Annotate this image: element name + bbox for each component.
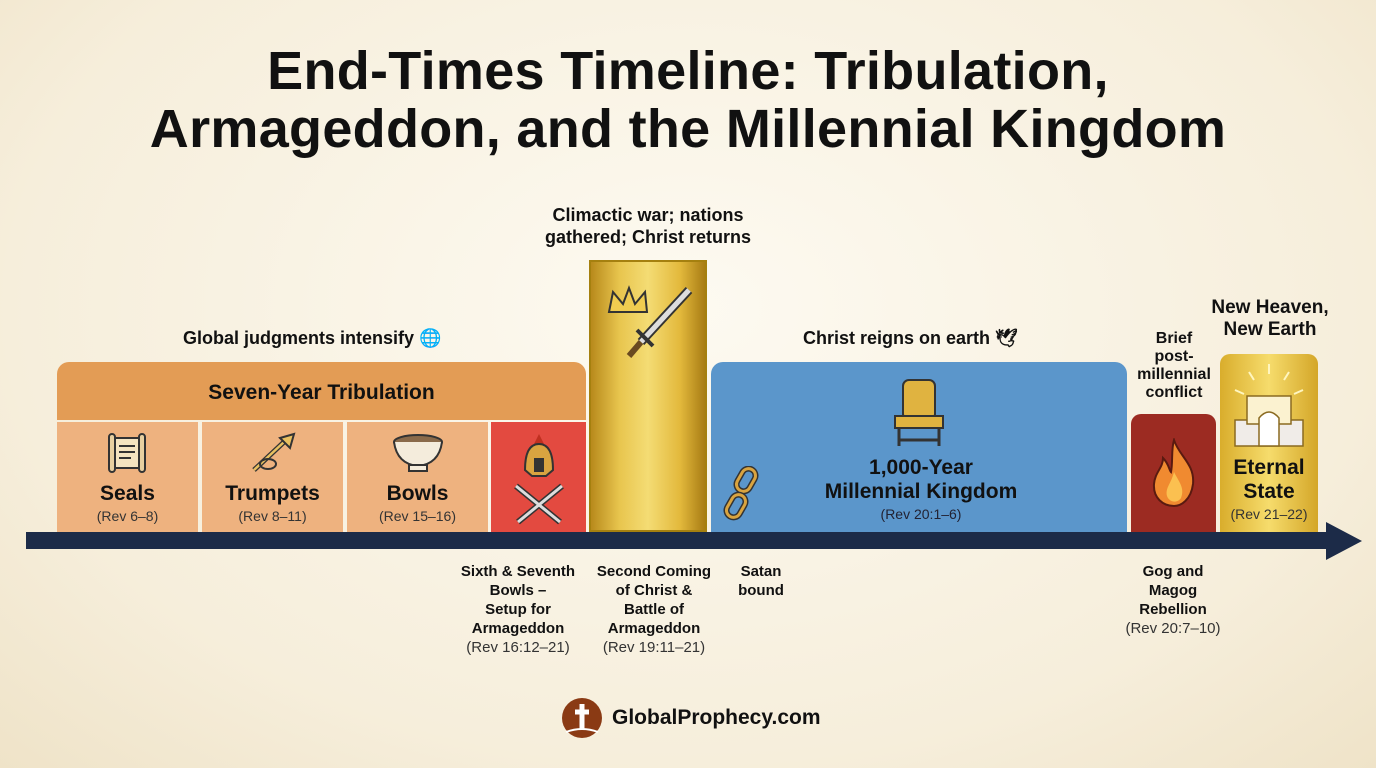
label: sixth & seventh bowls <box>461 563 575 656</box>
label: second coming <box>597 563 711 656</box>
title: Armageddon, and the Millennial Kingdom <box>150 99 1226 159</box>
panel: armageddon pillar <box>589 260 707 532</box>
panel: eternal state: State <box>1243 480 1295 503</box>
label: gog and magog: Gog and <box>1143 563 1203 580</box>
label: second coming: of Christ & <box>616 582 692 599</box>
label: sixth & seventh bowls: Sixth & Seventh <box>461 563 575 580</box>
panel: eternal state: Eternal <box>1233 456 1305 479</box>
label: second coming: (Rev 19:11–21) <box>603 639 705 656</box>
text: site name: GlobalProphecy.com <box>612 706 820 729</box>
panel: seals: Seals <box>100 482 155 505</box>
caption: brief conflict: conflict <box>1146 384 1202 401</box>
arrow: timeline <box>26 522 1362 560</box>
panel: seals <box>57 422 198 532</box>
panel: eternal state <box>1220 354 1318 532</box>
label: sixth & seventh bowls: Bowls – <box>490 582 546 599</box>
label: satan bound: Satan <box>741 563 781 580</box>
caption: brief conflict: millennial <box>1137 366 1211 383</box>
footer logo <box>562 698 820 738</box>
icon: crown and sword <box>608 285 692 358</box>
text: kingdom name <box>825 456 1017 503</box>
panel: sixth & seventh bowls <box>491 422 586 532</box>
panel: trumpets <box>202 422 343 532</box>
panel: millennial kingdom <box>711 362 1127 532</box>
caption: new heaven: New Heaven, New Earth <box>1211 297 1329 340</box>
label: sixth & seventh bowls: (Rev 16:12–21) <box>466 639 570 656</box>
label: satan bound: bound <box>738 582 784 599</box>
caption: climactic war: Climactic war; nations gathered; Christ returns <box>545 205 751 247</box>
label: gog and magog <box>1125 563 1221 637</box>
panel: millennial kingdom: (Rev 20:1–6) <box>881 506 961 522</box>
label: second coming: Battle of <box>624 601 684 618</box>
caption: christ reigns: Christ reigns on earth 🕊 <box>803 328 1018 348</box>
header band: Seven-Year Tribulation <box>208 381 435 404</box>
label: satan bound <box>738 563 784 599</box>
panel: bowls <box>347 422 488 532</box>
panel: gog and magog <box>1131 414 1216 532</box>
caption: brief conflict <box>1137 330 1211 401</box>
label: sixth & seventh bowls: Setup for <box>485 601 551 618</box>
panel: bowls: (Rev 15–16) <box>379 508 456 524</box>
caption: global judgments: Global judgments intensify 🌐 <box>183 328 441 348</box>
icon: throne <box>894 379 944 446</box>
label: sixth & seventh bowls: Armageddon <box>472 620 564 637</box>
text: kingdom name: 1,000-Year <box>869 456 973 479</box>
icon: bowl <box>393 434 443 472</box>
panel: trumpets: (Rev 8–11) <box>238 508 307 524</box>
icon: cross logo <box>562 698 602 738</box>
label: second coming: Second Coming <box>597 563 711 580</box>
caption: brief conflict: post- <box>1154 348 1194 365</box>
icon: flame <box>1152 438 1194 507</box>
title: End-Times Timeline: Tribulation, <box>267 41 1109 101</box>
text: kingdom name: Millennial Kingdom <box>825 480 1017 503</box>
label: second coming: Armageddon <box>608 620 700 637</box>
panel: trumpets: Trumpets <box>225 482 320 505</box>
icon: heavenly city <box>1234 364 1304 447</box>
panel: eternal state: (Rev 21–22) <box>1230 506 1308 522</box>
icon: scroll <box>108 433 146 473</box>
label: gog and magog: (Rev 20:7–10) <box>1125 620 1221 637</box>
label: gog and magog: Magog <box>1149 582 1197 599</box>
title <box>150 41 1226 159</box>
icon: broken chain <box>724 466 758 520</box>
header band <box>57 362 586 420</box>
icon: helmet & swords <box>514 434 564 524</box>
panel: bowls: Bowls <box>387 482 448 505</box>
panel: seals: (Rev 6–8) <box>97 508 158 524</box>
icon: trumpet <box>252 432 296 472</box>
caption: brief conflict: Brief <box>1156 330 1192 347</box>
label: gog and magog: Rebellion <box>1139 601 1207 618</box>
